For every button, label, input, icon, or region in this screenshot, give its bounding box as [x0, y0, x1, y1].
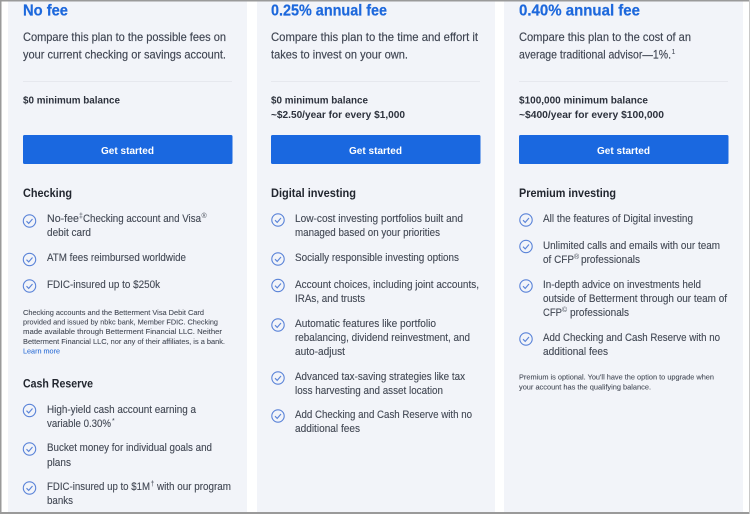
minimum balance and cost: ~$400/year for every $100,000 — [519, 110, 664, 121]
list: cash reserve features: plans — [47, 457, 71, 469]
description: average traditional advisor—1%. — [519, 48, 671, 62]
description: Compare this plan to the time and effort it — [271, 31, 479, 44]
list: premium investing features — [520, 213, 727, 358]
list: digital investing features — [272, 213, 479, 435]
list: checking features: ‡ — [79, 213, 83, 220]
list: cash reserve features: banks — [47, 495, 73, 507]
fine print: premium: Premium is optional. You'll have the option to upgrade when — [519, 372, 714, 382]
list: premium investing features: additional fees — [543, 346, 608, 358]
heading: digital investing: Digital investing — [271, 186, 356, 200]
list: cash reserve features: variable 0.30% — [47, 418, 111, 430]
list: premium investing features: professionals — [570, 307, 629, 319]
list: digital investing features: Socially responsible investing options — [295, 252, 459, 264]
panel: premium investing plan — [504, 2, 743, 512]
list: premium investing features: All the features of Digital investing — [543, 213, 693, 225]
minimum balance and cost: ~$2.50/year for every $1,000 — [271, 110, 405, 121]
fine print: checking — [23, 308, 225, 356]
button: get started — [271, 135, 480, 164]
description — [519, 31, 691, 62]
list: premium investing features: of CFP — [543, 254, 574, 266]
list: digital investing features: rebalancing, dividend reinvestment, and — [295, 332, 470, 344]
minimum balance and cost: $0 minimum balance — [271, 96, 368, 106]
description: takes to invest on your own. — [271, 48, 408, 62]
fine print: checking: Betterment Financial LLC, nor any of their affiliates, is a bank. — [23, 337, 225, 346]
list: checking features — [23, 212, 207, 292]
list: checking features: No-fee — [47, 213, 79, 225]
list: cash reserve features: High-yield cash account earning a — [47, 404, 196, 416]
panel: digital investing plan — [257, 2, 495, 512]
list: cash reserve features: * — [112, 418, 115, 425]
description: your current checking or savings account. — [23, 48, 226, 62]
list: cash reserve features: Bucket money for individual goals and — [47, 442, 212, 454]
list: digital investing features: managed based on your priorities — [295, 227, 440, 239]
fine print: checking: provided and issued by nbkc bank, Member FDIC. Checking — [23, 318, 218, 326]
list: digital investing features: auto-adjust — [295, 346, 345, 358]
list: digital investing features: Advanced tax-saving strategies like tax — [295, 371, 466, 383]
fine print: checking: Learn more — [23, 346, 60, 356]
list: cash reserve features: with our program — [156, 481, 231, 493]
heading: cash reserve: Cash Reserve — [23, 376, 93, 390]
list: premium investing features: outside of Betterment through our team of — [543, 293, 727, 305]
list: premium investing features: In-depth advice on investments held — [543, 279, 701, 291]
list: digital investing features: loss harvesting and asset location — [295, 385, 443, 397]
button: get started: Get started — [349, 146, 402, 157]
list: checking features: ® — [202, 212, 208, 220]
heading: 0.40% annual fee: 0.40% annual fee — [519, 2, 640, 20]
list: premium investing features: Unlimited calls and emails with our team — [543, 240, 720, 252]
list: premium investing features: ® — [574, 253, 580, 261]
button: get started: Get started — [597, 146, 650, 157]
list: premium investing features: CFP — [543, 307, 562, 319]
list: checking features: debit card — [47, 227, 91, 239]
panel: no fee plan — [8, 2, 247, 512]
description: Compare this plan to the possible fees on — [23, 31, 226, 44]
list: digital investing features: Automatic features like portfolio — [295, 318, 436, 330]
list: digital investing features: Low-cost investing portfolios built and — [295, 213, 463, 225]
description: Compare this plan to the cost of an — [519, 31, 691, 44]
button: get started: Get started — [101, 146, 154, 157]
button: get started — [23, 135, 232, 164]
heading: premium investing: Premium investing — [519, 186, 616, 200]
fine print: premium — [519, 372, 714, 392]
heading: 0.25% annual fee: 0.25% annual fee — [271, 2, 387, 20]
list: premium investing features: Add Checking and Cash Reserve with no — [543, 332, 720, 344]
list: cash reserve features — [23, 404, 231, 507]
list: premium investing features: © — [562, 306, 568, 314]
list: premium investing features: professionals — [581, 254, 640, 266]
heading: checking: Checking — [23, 186, 72, 200]
list: digital investing features: additional fees — [295, 423, 360, 435]
heading: no fee: No fee — [23, 2, 68, 20]
minimum balance and cost — [271, 96, 405, 121]
description — [23, 31, 226, 62]
list: digital investing features: IRAs, and trusts — [295, 293, 365, 305]
list: digital investing features: Add Checking and Cash Reserve with no — [295, 409, 472, 421]
list: cash reserve features: FDIC-insured up to $1M — [47, 481, 150, 493]
minimum balance and cost: $100,000 minimum balance — [519, 96, 648, 106]
list: checking features: FDIC-insured up to $250k — [47, 279, 161, 291]
minimum balance and cost — [519, 96, 664, 121]
button: get started — [519, 135, 728, 164]
fine print: checking: made available through Betterment Financial LLC. Neither — [23, 327, 222, 336]
minimum balance: $0 minimum balance — [23, 96, 120, 106]
fine print: premium: your account has the qualifying balance. — [519, 382, 651, 392]
description: 1 — [672, 49, 676, 56]
list: digital investing features: Account choices, including joint accounts, — [295, 279, 479, 291]
list: checking features: ATM fees reimbursed worldwide — [47, 252, 186, 264]
list: cash reserve features: † — [150, 481, 154, 488]
description — [271, 31, 479, 62]
fine print: checking: Checking accounts and the Betterment Visa Debit Card — [23, 308, 204, 317]
list: checking features: Checking account and Visa — [83, 213, 201, 225]
